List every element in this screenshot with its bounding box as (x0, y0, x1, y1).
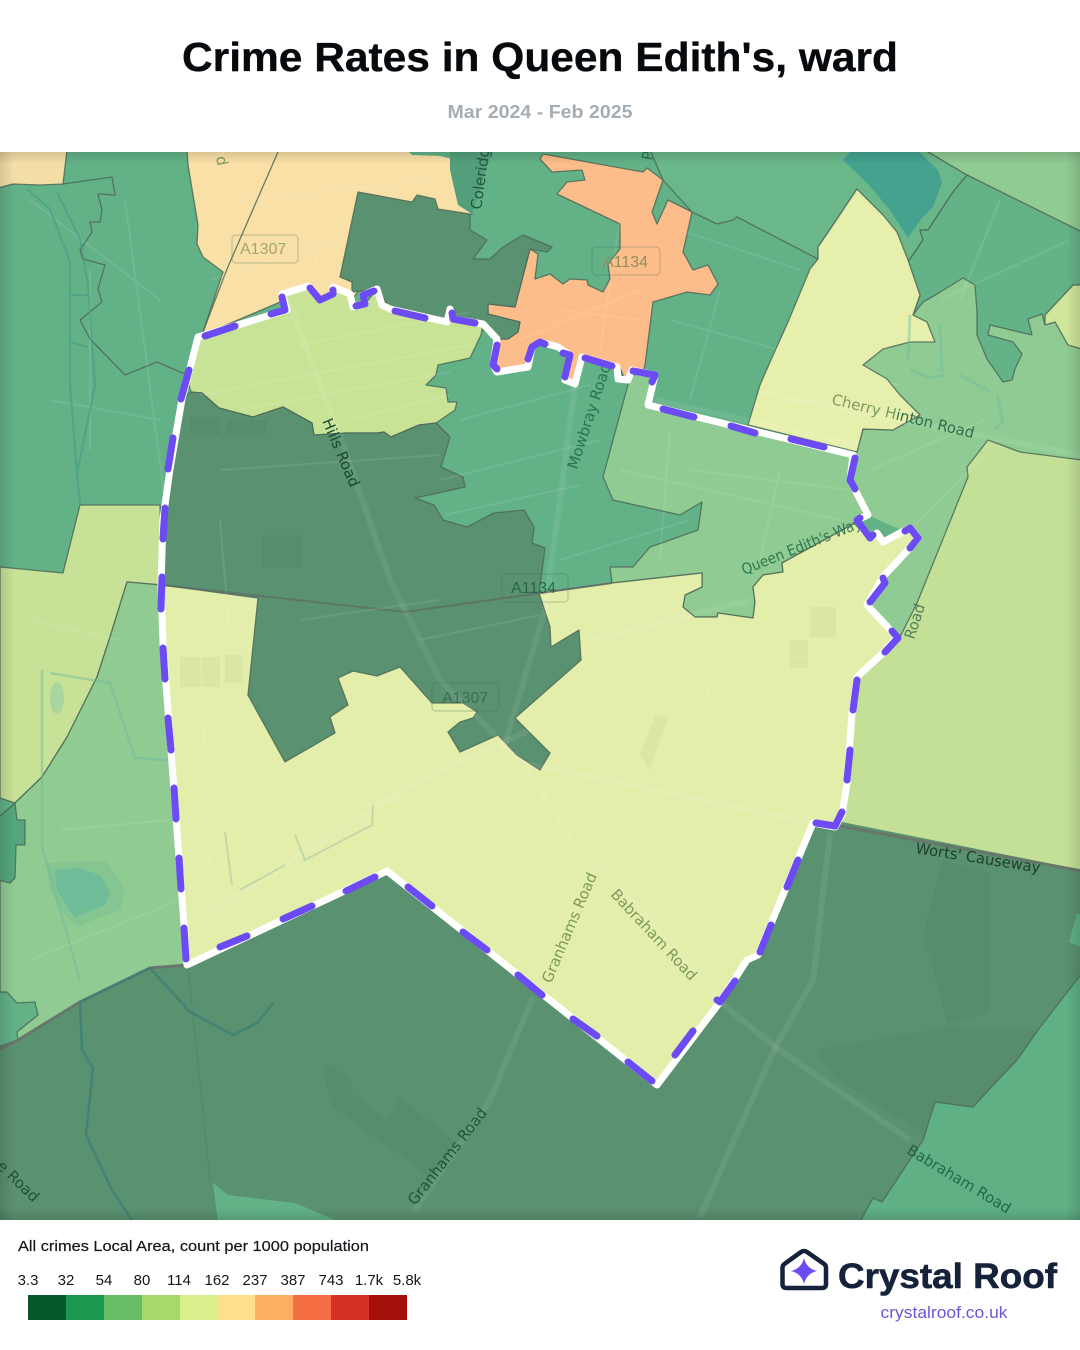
area: west green border (63, 177, 185, 375)
legend values: 743 (318, 1272, 344, 1289)
road label: top fragment P: P (638, 150, 658, 162)
area: orange high-crime block (488, 154, 718, 382)
website url: crystalroof.co.uk (880, 1304, 1008, 1322)
line in cream area (203, 152, 278, 332)
area: Hills Road lime (186, 286, 483, 437)
river west (27, 189, 95, 505)
area: dark green north (340, 192, 552, 339)
map left shade (0, 152, 14, 1220)
minor road network (30, 170, 1070, 960)
area: east light green strip (850, 429, 988, 637)
road shield: A1307 central: A1307 (442, 690, 488, 707)
legend values: 1.7k (355, 1272, 384, 1289)
area: south-west light green (0, 582, 187, 1050)
road shield: A1134 central: A1134 (511, 580, 556, 597)
area: teal pond (843, 150, 942, 238)
legend values: 5.8k (393, 1272, 422, 1289)
area: north-east band around pond (650, 150, 967, 262)
area: top-left corner cream (0, 150, 67, 188)
map (0, 147, 1080, 1222)
road shield: A1307 central (432, 683, 499, 711)
area: central light green (603, 372, 868, 618)
legend title: All crimes Local Area, count per 1000 population (18, 1238, 369, 1255)
major road network (205, 300, 1080, 1217)
legend values: 3.3 (18, 1272, 38, 1289)
strip lower boundary line (857, 429, 893, 452)
road label: Babraham Road: Babraham Road (607, 885, 701, 984)
path south thin (188, 967, 210, 1180)
area: south green notch (213, 1183, 340, 1222)
area: dark green southern farmland (0, 822, 1080, 1222)
stream ward south-west (225, 805, 373, 890)
road shield: A1134 north: A1134 (603, 254, 648, 271)
legend values: 32 (58, 1272, 74, 1289)
brand name: Crystal Roof (838, 1257, 1057, 1296)
area: small green at top (409, 152, 450, 158)
road label: Granhams Road south: Granhams Road (404, 1104, 491, 1208)
area: dark strip by Coleridge (450, 152, 492, 214)
stream south (80, 968, 273, 1222)
area: east light green (857, 278, 1080, 460)
area: top right light green (927, 152, 1080, 230)
boundary purple dashes (161, 288, 918, 1081)
pond in far west (50, 682, 64, 714)
ward boundary (161, 286, 918, 1085)
road shield: A1307 north: A1307 (240, 241, 286, 258)
grey road boundary (0, 825, 1080, 1050)
area: big lime east (840, 440, 1080, 875)
area: north-east mid green (908, 175, 1080, 382)
road shield: A1307 north (232, 235, 298, 263)
road shield: A1134 central (502, 574, 568, 602)
legend values: 387 (280, 1272, 306, 1289)
legend colour scale (28, 1295, 407, 1320)
road label: Babraham Road south: Babraham Road (904, 1141, 1014, 1217)
road label: Cherry Hinton Road: Cherry Hinton Road (830, 390, 976, 442)
area: green south-west edge (0, 992, 38, 1047)
area: pond south-west (47, 862, 125, 927)
subtitle: date range: Mar 2024 - Feb 2025 (448, 102, 632, 122)
road label: Granhams Road: Granhams Road (538, 870, 601, 986)
map background (0, 152, 900, 816)
streams in south-west (40, 670, 168, 980)
area: large pale yellow south ward (162, 520, 918, 1085)
road label: top fragment d: d (212, 155, 231, 167)
legend values: 80 (134, 1272, 150, 1289)
area: east edge green notch (1069, 913, 1080, 947)
legend values: 237 (242, 1272, 268, 1289)
logo: Crystal Roof (782, 1251, 1057, 1322)
boundary white casing (161, 286, 918, 1085)
road label: Mowbray Road: Mowbray Road (564, 361, 615, 471)
road label: Coleridge: Coleridg (467, 147, 494, 211)
map top shade (0, 152, 1080, 164)
legend values: 114 (167, 1272, 191, 1289)
legend values (18, 1272, 422, 1289)
road label: Queen Edith's Way: Queen Edith's Way (739, 514, 864, 579)
road label: Hills Road: Hills Road (318, 416, 363, 490)
map bottom shade (0, 1208, 1080, 1220)
grey line through dark ward (162, 583, 612, 612)
area: dark green central ward (162, 392, 581, 770)
road shield: A1134 north (592, 247, 660, 275)
legend values: 162 (204, 1272, 230, 1289)
road label: Worts' Causeway: Worts' Causeway (914, 839, 1042, 877)
road label: Road east: Road (901, 601, 929, 641)
area: cream north-west (187, 150, 472, 337)
area: light yellow Cherry Hinton (748, 189, 935, 452)
area: small dark south-west corner (0, 803, 25, 883)
title: Crime Rates in Queen Edith's, ward (182, 34, 898, 80)
area: far west lime (0, 505, 162, 803)
icon: house with star (782, 1251, 826, 1288)
pale stream (908, 315, 1003, 430)
legend (18, 1238, 422, 1320)
dark field patches (180, 418, 1037, 1177)
area: small lime top right (1045, 285, 1080, 349)
legend values: 54 (96, 1272, 112, 1289)
area: south-east green (860, 973, 1080, 1222)
map right shade (1066, 152, 1080, 1220)
